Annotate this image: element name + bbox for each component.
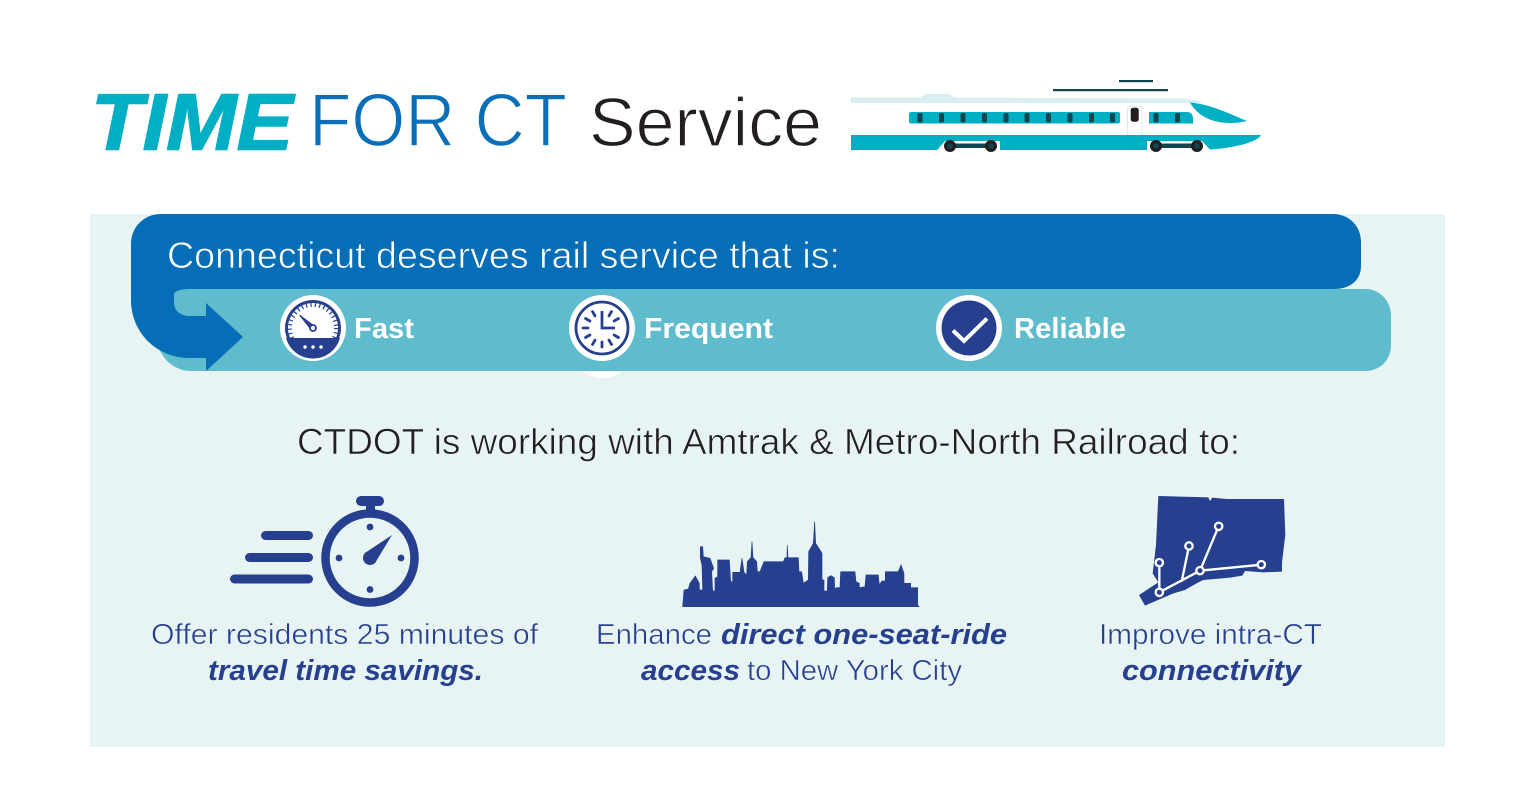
title: FOR CT <box>309 78 567 162</box>
text: direct one-seat-ride: direct one-seat-ride <box>721 619 1007 651</box>
panel: teal attributes bar <box>158 289 1391 371</box>
icon: stopwatch <box>230 496 414 602</box>
text: direct one-seat-ride: to New York City <box>747 655 962 687</box>
label: Frequent: Frequent <box>644 313 773 345</box>
icon: speedometer <box>280 295 346 361</box>
text: intra-CT connectivity: connectivity <box>1122 655 1303 687</box>
icon: check mark <box>936 295 1002 361</box>
label: Fast: Fast <box>354 313 414 345</box>
title: TIME <box>91 78 296 166</box>
panel: blue heading bar with arrow <box>131 214 1361 371</box>
text: direct one-seat-ride: Enhance <box>596 619 712 651</box>
icon: train <box>851 80 1261 152</box>
icon: clock backing peek <box>569 312 635 378</box>
title <box>91 78 822 166</box>
heading: Connecticut deserves: Connecticut deserves rail service that is: <box>167 235 840 276</box>
text: travel time savings: Offer residents 25 minutes of <box>151 619 539 651</box>
text: intra-CT connectivity: Improve intra-CT <box>1099 619 1322 651</box>
text: travel time savings: travel time savings. <box>208 655 483 687</box>
label: Reliable: Reliable <box>1014 313 1126 345</box>
heading: CTDOT working: CTDOT is working with Amtrak & Metro-North Railroad to: <box>297 421 1240 462</box>
icon: clock <box>569 295 635 361</box>
icon: Connecticut map <box>1139 496 1285 606</box>
panel: background <box>90 214 1445 747</box>
text: direct one-seat-ride: access <box>641 655 740 687</box>
text: direct one-seat-ride <box>596 619 1007 687</box>
text: intra-CT connectivity <box>1099 619 1322 687</box>
title: Service <box>589 84 822 161</box>
text: travel time savings <box>151 619 539 687</box>
icon: New York City skyline <box>683 522 919 607</box>
